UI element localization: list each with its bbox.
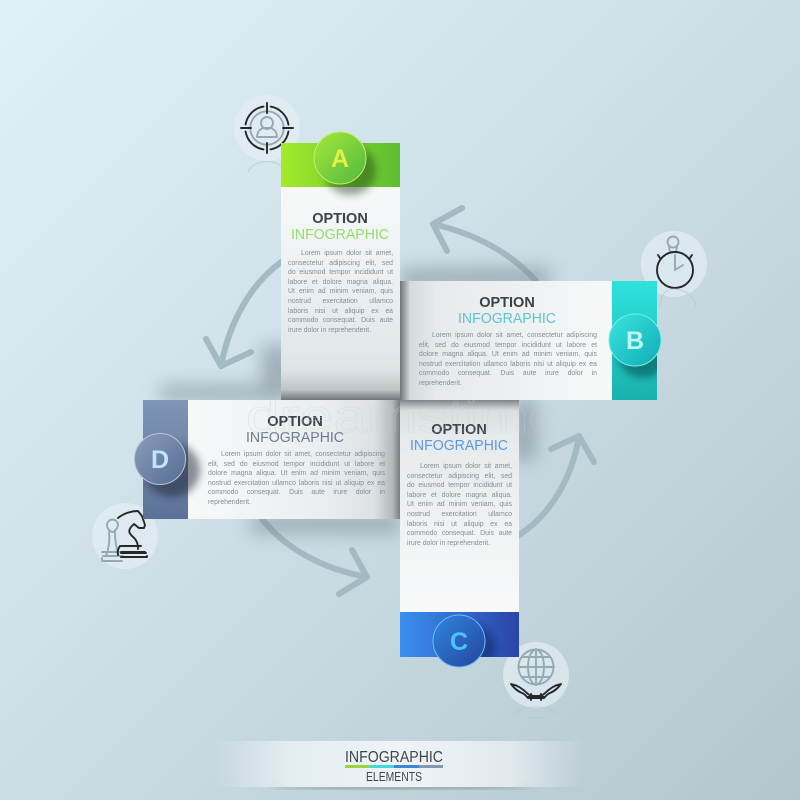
footer colour bar (345, 765, 443, 768)
text block: A: Ut enim ad minim veniam, quis (288, 288, 393, 295)
heading: A: INFOGRAPHIC (291, 227, 389, 243)
heading: C (410, 422, 508, 454)
heading: B: OPTION (479, 295, 535, 311)
text block: A: labore et dolore magna aliqua. (288, 279, 393, 286)
text block: D (208, 450, 385, 512)
arrow: right arc C to B (519, 436, 594, 535)
icon: target person (234, 95, 300, 172)
badge: D (134, 434, 200, 497)
footer banner (215, 741, 585, 788)
text block: C: Lorem ipsum dolor sit amet, (420, 463, 512, 470)
badge: A (314, 132, 376, 195)
card D (143, 400, 400, 519)
heading: A (291, 211, 389, 243)
footer title: INFOGRAPHIC (345, 749, 443, 766)
card B (400, 281, 657, 400)
text block: B (419, 331, 597, 393)
heading: B: INFOGRAPHIC (458, 311, 556, 327)
arrow: bottom arc D to C (262, 519, 367, 594)
text block: A: consectetur adipiscing elit, sed (288, 260, 393, 267)
soft card shadows (160, 268, 550, 533)
badge: C (433, 615, 496, 672)
footer subtitle: ELEMENTS (366, 769, 422, 784)
heading: C: OPTION (431, 422, 487, 438)
badge: A: A (331, 145, 349, 173)
text block: B: elit, sed do eiusmod tempor incididunt ut labore et (419, 342, 597, 349)
card A (281, 143, 400, 400)
text block: C: laboris nisi ut aliquip ex ea (407, 521, 512, 528)
text block: D: dolore magna aliqua. Ut enim ad minim veniam, quis (208, 470, 385, 477)
text block: D: commodo consequat. Duis aute irure dolor in (208, 489, 385, 496)
text block: A: Lorem ipsum dolor sit amet, (301, 250, 393, 257)
text block: C (407, 462, 512, 552)
text block: B: Lorem ipsum dolor sit amet, consectetur adipiscing (432, 332, 597, 339)
text block: A: irure dolor in reprehenderit. (288, 327, 371, 334)
text block: C: consectetur adipiscing elit, sed (407, 473, 512, 480)
text block: C: commodo consequat. Duis aute (407, 530, 512, 537)
text block: D: elit, sed do eiusmod tempor incididunt ut labore et (208, 461, 385, 468)
badge: D: D (151, 446, 169, 474)
text block: A: commodo consequat. Duis aute (288, 317, 393, 324)
text block: C: do eiusmod tempor incididunt ut (407, 482, 512, 489)
text block: C: nostrud exercitation ullamco (407, 511, 512, 518)
icon: hands holding globe (503, 642, 569, 722)
text block: C: irure dolor in reprehenderit. (407, 540, 490, 547)
heading: D: INFOGRAPHIC (246, 430, 344, 446)
text block: B: reprehenderit. (419, 380, 462, 387)
text block: D: nostrud exercitation ullamco laboris nisi ut aliquip ex ea (208, 480, 385, 487)
text block: B: dolore magna aliqua. Ut enim ad minim veniam, quis (419, 351, 597, 358)
text block: A: nostrud exercitation ullamco (288, 298, 393, 305)
text block: D: reprehenderit. (208, 499, 251, 506)
heading: C: INFOGRAPHIC (410, 438, 508, 454)
text block: C: labore et dolore magna aliqua. (407, 492, 512, 499)
heading: A: OPTION (312, 211, 368, 227)
card C (400, 400, 519, 657)
heading: D (246, 414, 344, 446)
heading: D: OPTION (267, 414, 323, 430)
watermark: dreamstime (246, 390, 562, 442)
badge: C: C (450, 628, 468, 656)
text block: A: do eiusmod tempor incididunt ut (288, 269, 393, 276)
icon: chess pieces (92, 503, 158, 569)
text block: A: laboris nisi ut aliquip ex ea (288, 308, 393, 315)
text block: B: commodo consequat. Duis aute irure dolor in (419, 370, 597, 377)
badge: B: B (626, 327, 644, 355)
text block: C: Ut enim ad minim veniam, quis (407, 501, 512, 508)
icon: stopwatch (641, 231, 707, 307)
heading: B (458, 295, 556, 327)
arrow: left arc A to D (206, 262, 281, 366)
badge: B (609, 314, 669, 378)
text block: B: nostrud exercitation ullamco laboris nisi ut aliquip ex ea (419, 361, 597, 368)
arrow: top arc B to A (433, 208, 536, 281)
text block: D: Lorem ipsum dolor sit amet, consectetur adipiscing (221, 451, 385, 458)
text block: A (288, 249, 393, 339)
